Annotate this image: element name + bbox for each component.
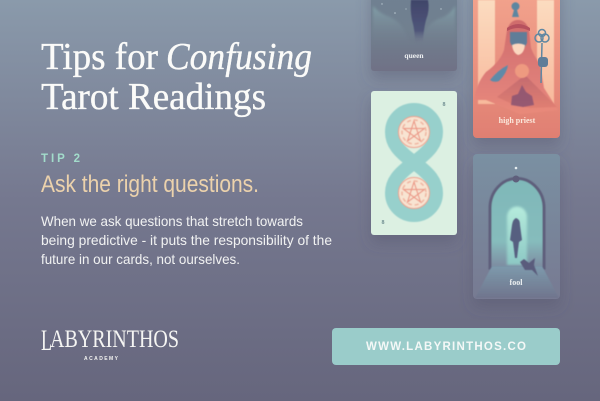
card: queen: [371, 0, 457, 71]
card: eight of pentacles: [371, 91, 457, 235]
numeral bottom: 8: [382, 220, 384, 226]
priest beard: [512, 44, 525, 55]
queen stars: [381, 3, 442, 14]
body text: [41, 213, 332, 267]
keyhole: [512, 2, 520, 17]
card: high priest: [473, 0, 560, 138]
title: [41, 36, 312, 118]
logo: ABYRINTHOS: [50, 326, 179, 353]
fool arch keystone: [512, 176, 520, 182]
fool arch: [490, 178, 544, 268]
priest label: high priest: [499, 116, 536, 125]
priest city: [511, 85, 534, 107]
queen clouds: [373, 6, 455, 48]
priest robe: [474, 20, 558, 114]
logo: ACADEMY: [84, 356, 119, 362]
priest mountain: [497, 75, 557, 108]
queen label: queen: [404, 51, 424, 60]
body text: When we ask questions that stretch towards: [41, 213, 303, 229]
logo: L: [41, 324, 52, 357]
numeral top: 8: [442, 102, 446, 108]
priest mask: [510, 32, 527, 49]
top pentacle: [398, 116, 430, 148]
body text: future in our cards, not ourselves.: [41, 251, 240, 267]
fool floor: [475, 266, 559, 298]
fool dog: [520, 258, 538, 276]
logo: [41, 324, 179, 362]
url button: WWW.LABYRINTHOS.CO: [366, 341, 526, 353]
title: Tips for: [41, 36, 158, 78]
priest sun: [515, 64, 529, 78]
tip heading: Ask the right questions.: [41, 171, 259, 198]
queen figure: [411, 0, 429, 44]
fool label: fool: [510, 278, 523, 287]
priest hat band: [507, 24, 530, 31]
fool figure: [510, 218, 522, 258]
priest key: [535, 30, 549, 83]
tip label: TIP 2: [41, 153, 80, 165]
url button: [332, 328, 560, 365]
title: Tarot Readings: [41, 76, 266, 118]
card: fool: [473, 154, 560, 299]
body text: being predictive - it puts the responsibility of the: [41, 232, 332, 248]
title: Confusing: [166, 36, 312, 78]
bottom pentacle: [398, 178, 430, 208]
infinity loop: [392, 110, 436, 215]
fool inner glow: [507, 206, 527, 265]
priest pillars: [478, 0, 554, 104]
fool star: [515, 167, 517, 169]
priest feather: [490, 65, 508, 82]
priest hand: [538, 57, 548, 67]
